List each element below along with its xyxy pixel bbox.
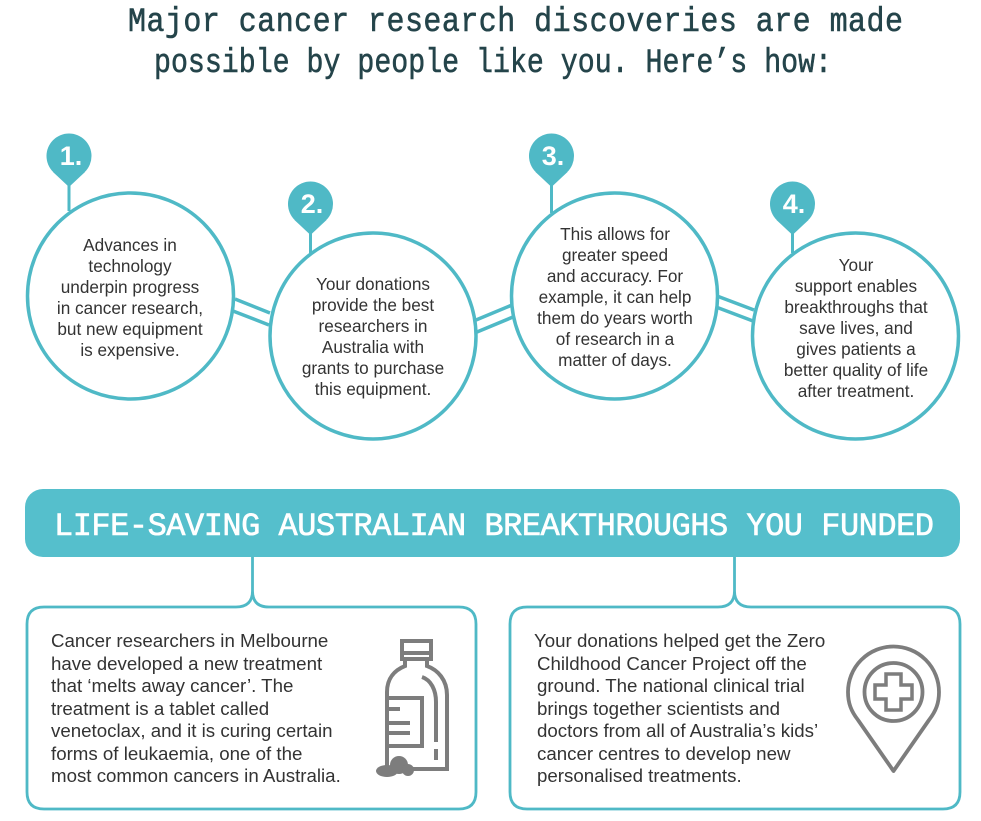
text 4: after treatment. xyxy=(798,381,914,401)
panel text: doctors from all of Australia’s kids’ xyxy=(537,720,818,741)
text 1: in cancer research, xyxy=(57,298,203,318)
panel text: forms of leukaemia, one of the xyxy=(51,743,302,764)
banner: LIFE-SAVING AUSTRALIAN BREAKTHROUGHS YOU FUNDED xyxy=(54,508,934,545)
panel text: personalised treatments. xyxy=(537,765,742,786)
step 2 xyxy=(270,182,476,439)
pin 4: 4. xyxy=(783,189,805,219)
panel text: most common cancers in Australia. xyxy=(51,765,341,786)
connector: step 2 to 3 xyxy=(476,305,513,332)
text 3: of research in a xyxy=(556,329,675,349)
step 3 xyxy=(512,134,718,399)
pin 2 xyxy=(288,182,333,253)
text 2: Australia with xyxy=(322,337,424,357)
text 3: and accuracy. For xyxy=(547,266,683,286)
panel text: venetoclax, and it is curing certain xyxy=(51,720,332,741)
text 4: support enables xyxy=(795,276,917,296)
text 2: provide the best xyxy=(312,295,434,315)
panel: zero childhood cancer xyxy=(510,557,960,809)
panel text: treatment is a tablet called xyxy=(51,698,269,719)
connector: step 3 to 4 xyxy=(716,296,754,321)
title: possible by people like you. Here’s how: xyxy=(154,43,832,83)
text 1: Advances in xyxy=(83,235,177,255)
text 1: is expensive. xyxy=(80,340,180,360)
panel text: Cancer researchers in Melbourne xyxy=(51,630,328,651)
text 1: technology xyxy=(88,256,172,276)
circle 4 xyxy=(752,233,958,439)
pin 4 xyxy=(770,182,815,253)
pin 3: 3. xyxy=(542,141,564,171)
panel: melbourne treatment xyxy=(27,557,476,809)
text 2: Your donations xyxy=(316,274,430,294)
circle 1 xyxy=(28,193,234,399)
pin 2: 2. xyxy=(301,189,323,219)
step 1 xyxy=(28,134,234,399)
title: Major cancer research discoveries are made xyxy=(128,2,903,42)
circle 3 xyxy=(512,193,718,399)
text 3: example, it can help xyxy=(539,287,691,307)
step 4 xyxy=(752,182,958,439)
circle 2 xyxy=(270,233,476,439)
pin 1 xyxy=(46,134,92,211)
text 4: Your xyxy=(839,255,874,275)
connector: step 1 to 2 xyxy=(233,299,270,325)
text 3: matter of days. xyxy=(558,350,672,370)
text 2: grants to purchase xyxy=(302,358,444,378)
icon: medical location pin xyxy=(848,646,939,771)
banner xyxy=(25,489,960,557)
panel text: Childhood Cancer Project off the xyxy=(537,653,807,674)
panel text: that ‘melts away cancer’. The xyxy=(51,675,293,696)
text 4: save lives, and xyxy=(799,318,913,338)
pin 3 xyxy=(529,134,574,213)
title xyxy=(128,2,903,83)
text 3: them do years worth xyxy=(537,308,693,328)
panel text: brings together scientists and xyxy=(537,698,780,719)
panel text: Your donations helped get the Zero xyxy=(534,630,825,651)
text 4: gives patients a xyxy=(796,339,916,359)
text 2: this equipment. xyxy=(315,379,431,399)
text 1: underpin progress xyxy=(61,277,199,297)
text 4: breakthroughs that xyxy=(784,297,928,317)
text 3: This allows for xyxy=(560,224,670,244)
text 4: better quality of life xyxy=(784,360,928,380)
panel text: ground. The national clinical trial xyxy=(537,675,805,696)
text 2: researchers in xyxy=(319,316,427,336)
text 3: greater speed xyxy=(562,245,668,265)
panel text: cancer centres to develop new xyxy=(537,743,791,764)
panel outline with connector xyxy=(27,557,476,809)
icon: medicine bottle xyxy=(376,641,447,777)
panel text: have developed a new treatment xyxy=(51,653,323,674)
panel outline with connector xyxy=(510,557,960,809)
pin 1: 1. xyxy=(60,141,82,171)
text 1: but new equipment xyxy=(57,319,203,339)
